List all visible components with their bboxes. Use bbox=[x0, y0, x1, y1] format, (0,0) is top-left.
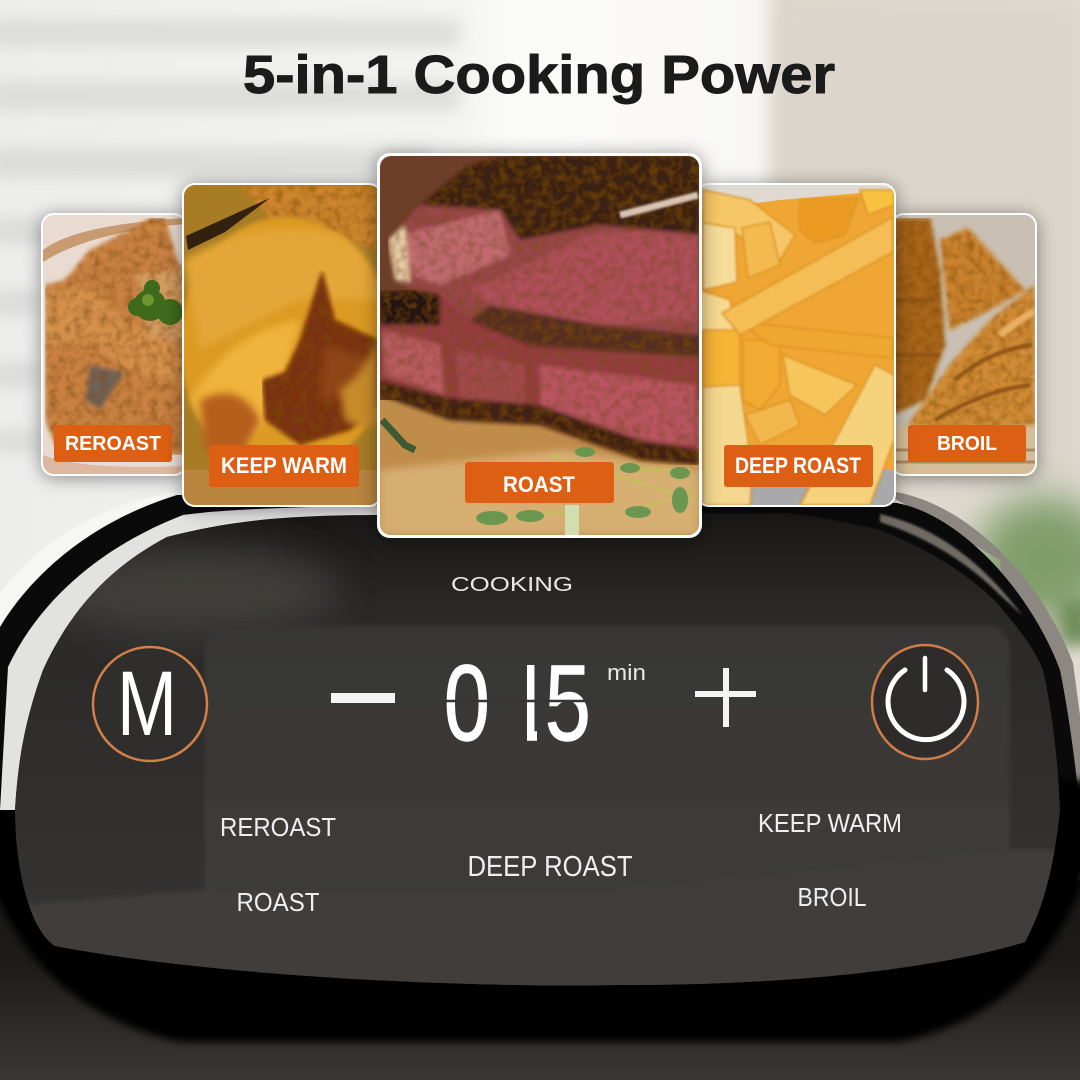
food card: croissants, BROIL: BROIL bbox=[937, 433, 997, 455]
glass reflections bbox=[20, 545, 1060, 1000]
black band upper bbox=[0, 495, 1080, 860]
glass front bbox=[15, 513, 1060, 985]
food card: fried chicken, REROAST: REROAST bbox=[65, 433, 161, 455]
food card: french fries, DEEP ROAST: DEEP ROAST bbox=[735, 453, 861, 478]
lower steak bbox=[380, 290, 699, 465]
top right highlight bbox=[880, 514, 1022, 615]
food card: steak, ROAST bbox=[377, 153, 702, 538]
timer display: 015 min: min bbox=[607, 660, 646, 685]
herbs bbox=[508, 454, 696, 519]
inner white rim bbox=[0, 505, 390, 810]
timer display: 015 min bbox=[446, 664, 644, 742]
food card: french fries, DEEP ROAST bbox=[696, 183, 896, 507]
black lower housing bbox=[0, 780, 1080, 1042]
plus button bbox=[695, 668, 756, 727]
food card: roast chicken, KEEP WARM bbox=[180, 183, 390, 507]
function label: REROAST: REROAST bbox=[220, 812, 336, 842]
button: power bbox=[872, 645, 978, 759]
food card: steak, ROAST: ROAST bbox=[503, 472, 576, 497]
timer display: 015 min: 5 bbox=[545, 643, 591, 764]
minus button bbox=[331, 693, 395, 703]
food card: croissants, BROIL bbox=[891, 213, 1037, 476]
outer grey rim right bbox=[880, 490, 1080, 880]
countertop and lower shadow bbox=[0, 780, 1080, 1080]
function label: ROAST: ROAST bbox=[236, 887, 320, 917]
food card: roast chicken, KEEP WARM: KEEP WARM bbox=[221, 453, 347, 478]
LCD segment gaps bbox=[445, 700, 592, 702]
timer display: 015 min: 0 bbox=[444, 643, 490, 764]
air fryer body bbox=[0, 490, 1080, 1080]
function label: DEEP ROAST: DEEP ROAST bbox=[468, 851, 633, 883]
outer white rim left bbox=[0, 490, 400, 700]
function label: BROIL: BROIL bbox=[798, 882, 866, 912]
timer display: 015 min: 1 bbox=[506, 643, 552, 764]
food card: fried chicken, REROAST bbox=[41, 213, 187, 476]
title: 5-in-1 Cooking Power bbox=[243, 45, 835, 105]
panel label: COOKING: COOKING bbox=[451, 574, 573, 596]
button: M mode bbox=[93, 647, 207, 761]
upper steak bbox=[388, 156, 699, 355]
function label: KEEP WARM: KEEP WARM bbox=[758, 808, 902, 838]
button: M mode: M bbox=[117, 653, 177, 755]
